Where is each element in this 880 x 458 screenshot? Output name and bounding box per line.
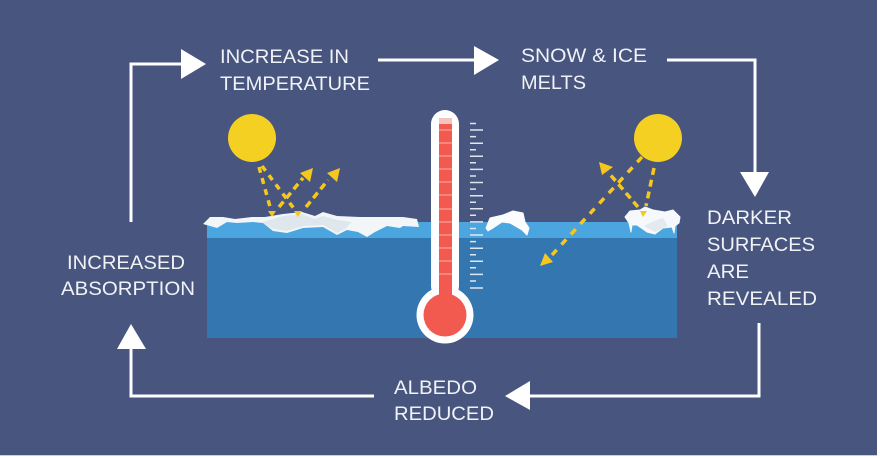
text: increased absorption (61, 252, 195, 300)
text: darker surfaces are revealed: SURFACES (707, 234, 815, 256)
icon: small ice floe (486, 211, 529, 235)
icon: right sun (634, 114, 682, 162)
text: darker surfaces are revealed (707, 207, 817, 310)
icon: thermometer scale (470, 124, 483, 288)
text: darker surfaces are revealed: REVEALED (707, 288, 817, 310)
text: darker surfaces are revealed: ARE (707, 261, 749, 283)
text: albedo reduced (394, 377, 494, 425)
icon: left ice sheet (203, 212, 419, 237)
text: albedo reduced: REDUCED (394, 403, 494, 425)
icon: right ice floe (625, 207, 680, 234)
text: snow and ice melts: MELTS (521, 72, 586, 94)
text: snow and ice melts: SNOW & ICE (521, 45, 647, 67)
arrow: darker surfaces to albedo (505, 323, 759, 410)
text: increase in temperature: INCREASE IN (220, 46, 349, 68)
icon: left sun (228, 114, 276, 162)
arrow: albedo to absorption (117, 324, 374, 396)
arrow: melt to darker surfaces (667, 60, 769, 197)
icon: thermometer (416, 110, 474, 344)
text: snow and ice melts (521, 45, 647, 94)
text: increase in temperature (220, 46, 370, 95)
panel: water block (207, 222, 677, 338)
text: darker surfaces are revealed: DARKER (707, 207, 792, 229)
icon: left sun rays (259, 166, 340, 217)
text: increased absorption: ABSORPTION (61, 278, 195, 300)
icon: right sun rays (540, 157, 654, 266)
arrow: absorption to temperature (131, 49, 206, 222)
text: albedo reduced: ALBEDO (394, 377, 477, 399)
text: increased absorption: INCREASED (67, 252, 185, 274)
text: increase in temperature: TEMPERATURE (220, 73, 370, 95)
arrow: temperature to melt (378, 46, 499, 75)
